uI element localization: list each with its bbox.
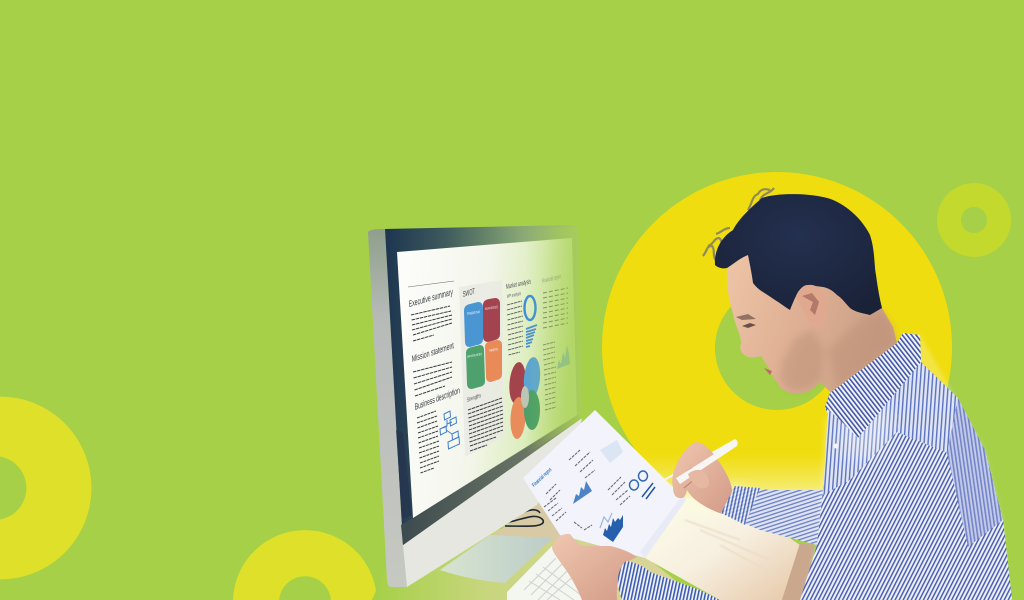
faint line chart xyxy=(600,513,612,528)
heading: strengths: Strengths xyxy=(467,392,481,404)
monitor xyxy=(368,225,582,587)
neck and face xyxy=(727,245,897,394)
shoulder panel xyxy=(897,362,958,453)
financial column, faded xyxy=(542,273,570,410)
financial column, faded: Financial report xyxy=(542,273,561,285)
heading: mission statement: Mission statement xyxy=(412,340,454,364)
neck shadow xyxy=(828,310,897,388)
lips xyxy=(764,368,772,375)
body: strengths xyxy=(468,398,503,451)
ring: bottom xyxy=(233,530,377,600)
swot box: threats xyxy=(485,340,502,382)
desk surface xyxy=(372,520,700,600)
swot box: weaknesses: WEAKNESSES xyxy=(485,305,498,311)
reflection on bezel xyxy=(396,430,412,520)
large yellow ring behind person xyxy=(602,172,952,522)
desk notebook xyxy=(645,498,800,600)
ring: left edge xyxy=(0,396,92,580)
shirt button xyxy=(834,444,838,448)
eye xyxy=(742,323,756,328)
faint map xyxy=(600,440,623,463)
swot box: opportunities: OPPORTUNITIES xyxy=(467,352,482,359)
table xyxy=(543,288,568,328)
chest panel xyxy=(823,360,900,495)
screen bezel xyxy=(385,225,582,545)
swot box: strengths: STRENGTHS xyxy=(467,310,480,316)
hair xyxy=(715,194,882,315)
lower bezel shadow xyxy=(401,415,582,545)
heading rule xyxy=(408,281,454,287)
paper sheet xyxy=(523,410,686,558)
upper arm xyxy=(947,398,1003,547)
thumb over pen xyxy=(688,470,709,488)
ear xyxy=(796,285,827,328)
donut chart xyxy=(524,296,536,320)
text blocks xyxy=(544,450,630,530)
document column panel xyxy=(459,280,504,457)
shirt glow xyxy=(805,335,1008,590)
heading: market analysis: Market analysis xyxy=(506,278,531,291)
swot box: weaknesses xyxy=(483,298,500,342)
hair curls xyxy=(703,188,774,262)
green fade at right of screen xyxy=(525,226,582,455)
subheading: WP analysis xyxy=(507,291,521,300)
collar xyxy=(825,333,921,438)
wood grain xyxy=(685,520,775,575)
lines chart xyxy=(642,483,655,499)
area chart xyxy=(557,345,570,369)
column 1 text xyxy=(409,287,460,473)
swot box: opportunities xyxy=(466,345,485,389)
bar chart xyxy=(603,515,623,542)
pen xyxy=(655,439,738,484)
title: financial report: Financial report xyxy=(531,467,553,488)
financial report paper xyxy=(523,410,686,558)
swot box: strengths xyxy=(464,302,483,347)
lower arm xyxy=(935,520,1012,600)
cables xyxy=(503,510,543,526)
heading: executive summary: Executive summary xyxy=(409,287,453,309)
ring: top right xyxy=(937,183,1011,257)
finger creases xyxy=(678,462,712,488)
swot box: threats: THREATS xyxy=(489,347,498,353)
chest highlight xyxy=(831,391,901,469)
right cuff xyxy=(721,486,760,525)
screen xyxy=(397,238,577,518)
body lines xyxy=(507,301,523,355)
desk glow xyxy=(677,488,753,512)
paper fold shadow xyxy=(640,496,686,558)
right hand xyxy=(672,442,733,514)
body: mission statement xyxy=(413,362,452,396)
body: business description xyxy=(417,411,439,473)
keys xyxy=(524,558,585,600)
desk edge xyxy=(782,543,815,600)
heading: SWOT: SWOT xyxy=(463,287,475,299)
stubble shadow xyxy=(780,330,824,390)
SWOT column xyxy=(463,287,503,451)
chin xyxy=(403,418,582,587)
area chart xyxy=(573,481,592,504)
right sleeve xyxy=(721,486,823,545)
keyboard xyxy=(507,546,600,600)
person xyxy=(703,188,1012,600)
donut charts xyxy=(630,471,648,490)
inner ear xyxy=(802,293,819,315)
body lines xyxy=(543,342,556,410)
venn diagram xyxy=(508,356,542,439)
wood behind monitor with cables xyxy=(490,498,575,545)
left hand xyxy=(552,534,637,600)
market analysis column xyxy=(506,278,542,439)
monitor stand xyxy=(440,535,552,583)
heading: business description: Business description xyxy=(415,385,460,412)
shirt body xyxy=(800,333,1012,600)
left cuff xyxy=(618,561,720,600)
yellow fade near desk xyxy=(640,455,830,515)
eyebrow xyxy=(736,314,756,320)
pen over hand xyxy=(676,441,738,484)
silver side edge xyxy=(368,229,407,587)
funnel bars xyxy=(526,325,537,347)
body: executive summary xyxy=(411,306,452,341)
org chart xyxy=(440,411,460,449)
